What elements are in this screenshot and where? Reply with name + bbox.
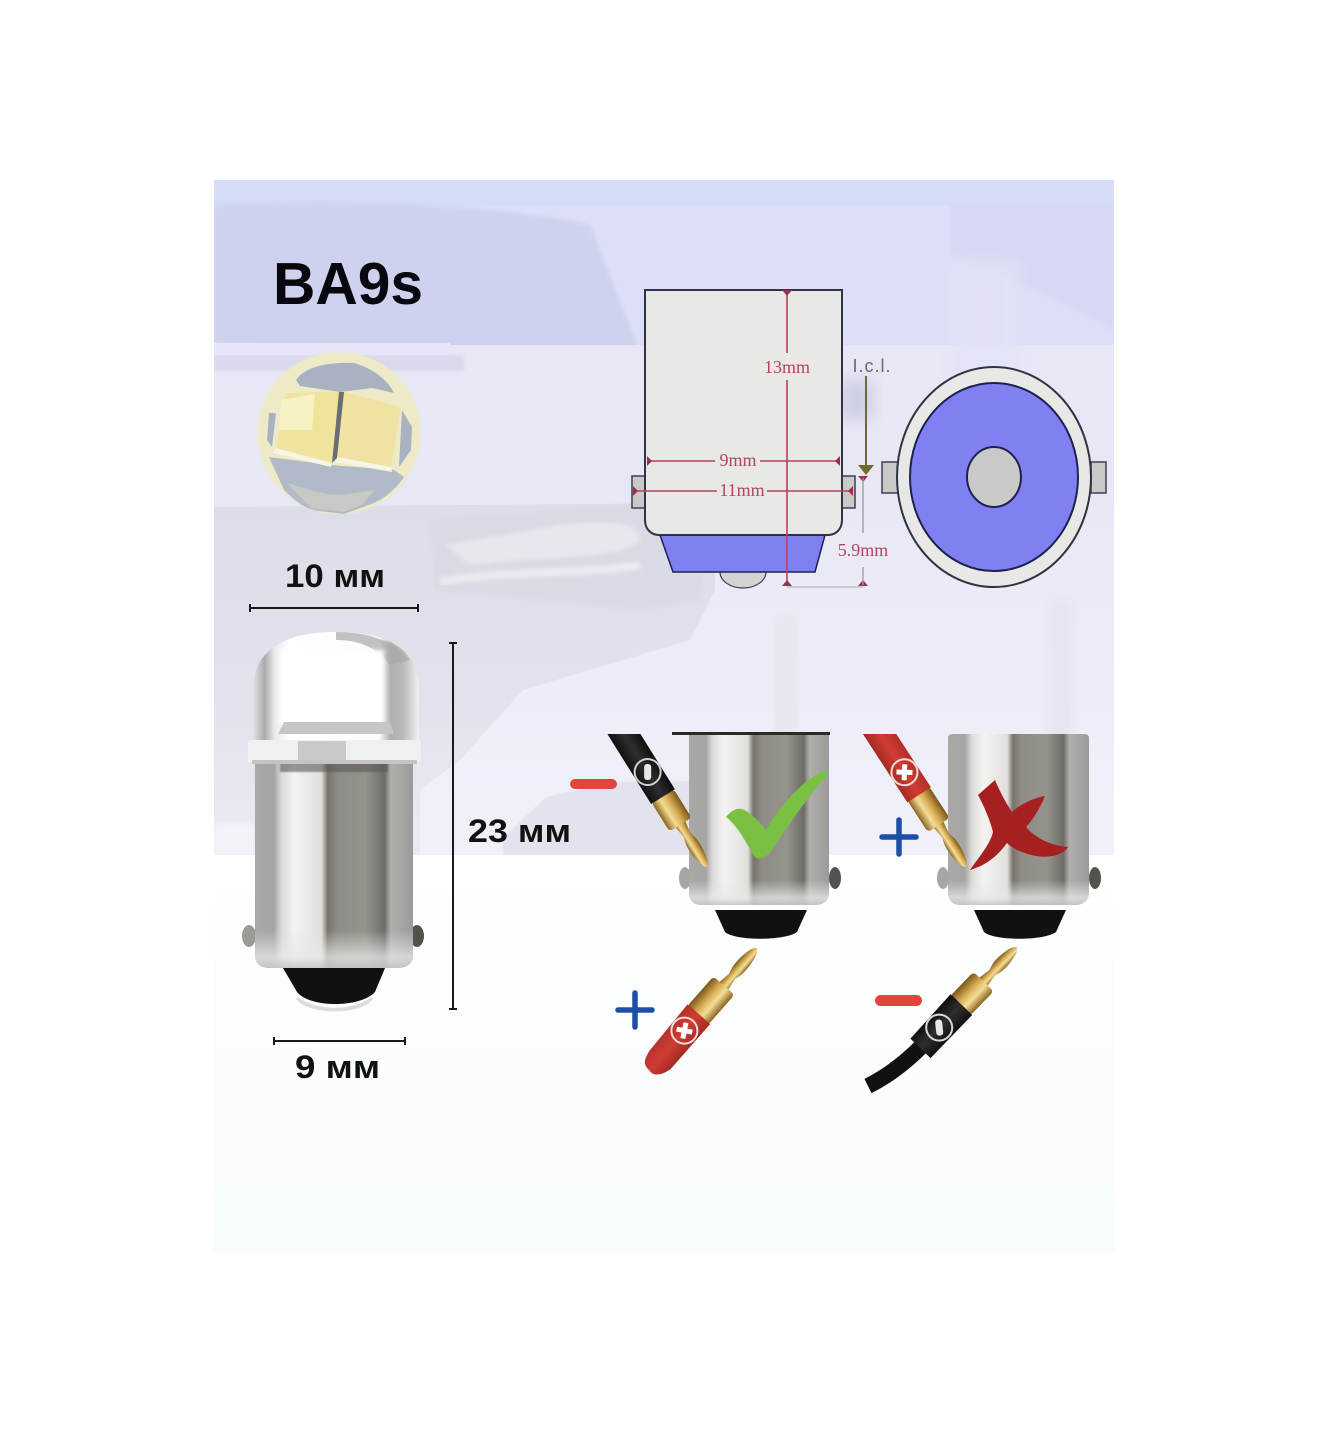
drawing: dimension lines (633, 291, 853, 586)
plug: black negative, correct top (607, 734, 708, 867)
label: I.c.l.: I.c.l. (852, 356, 892, 376)
icon: green check mark (726, 771, 829, 858)
bulb pins (242, 925, 424, 947)
symbol: plus, top right (882, 820, 916, 854)
bulb black base (715, 910, 807, 939)
title: BA9s: BA9s (273, 251, 423, 317)
bulb pins (937, 867, 949, 889)
bulb metal body (948, 734, 1089, 905)
plug: red positive, wrong top (863, 734, 967, 867)
label: 10 мм: 10 мм (285, 558, 385, 594)
label: 23 мм: 23 мм (468, 813, 571, 849)
dimension line: 10 mm width (250, 604, 418, 612)
drawing: bottom contact (720, 556, 766, 588)
chart: side view technical drawing (632, 290, 892, 588)
bulb metal body (255, 763, 413, 968)
plug: red positive, correct bottom (638, 938, 768, 1081)
bulb tip and base (297, 998, 372, 1010)
label: 11mm: 11mm (719, 480, 765, 500)
bulb metal body (672, 732, 830, 905)
dimension: 5.9mm line (862, 478, 864, 585)
label: 5.9mm: 5.9mm (838, 540, 888, 560)
symbol: minus, top left (570, 779, 617, 789)
panel: background car photo (214, 180, 1114, 1253)
symbol: plus, bottom left (618, 993, 652, 1027)
bulb lens (253, 632, 419, 745)
plug: black negative, wrong bottom (868, 937, 1028, 1086)
drawing: blue base (660, 535, 825, 572)
bulb black base (974, 910, 1066, 939)
illustration: correct polarity bulb (672, 732, 841, 939)
bulb pins (679, 867, 691, 889)
arrow: light center length (865, 376, 867, 466)
bulb collar ring (248, 740, 421, 764)
drawing: body (645, 290, 842, 535)
drawing: side pins (632, 476, 855, 508)
label: 13mm: 13mm (764, 357, 810, 377)
label: 9 мм: 9 мм (295, 1049, 380, 1085)
illustration: wrong polarity bulb (937, 734, 1101, 939)
label: 9mm: 9mm (719, 450, 757, 470)
icon: LED bulb front view (257, 352, 421, 514)
dimension line: 9 mm width (274, 1037, 405, 1045)
illustration: main bulb with dimensions (242, 632, 424, 1010)
icon: red cross mark (970, 780, 1068, 870)
chart: bottom view technical drawing (882, 367, 1106, 587)
symbol: minus, bottom right (875, 995, 922, 1006)
dimension line: 23 mm height (449, 643, 457, 1009)
